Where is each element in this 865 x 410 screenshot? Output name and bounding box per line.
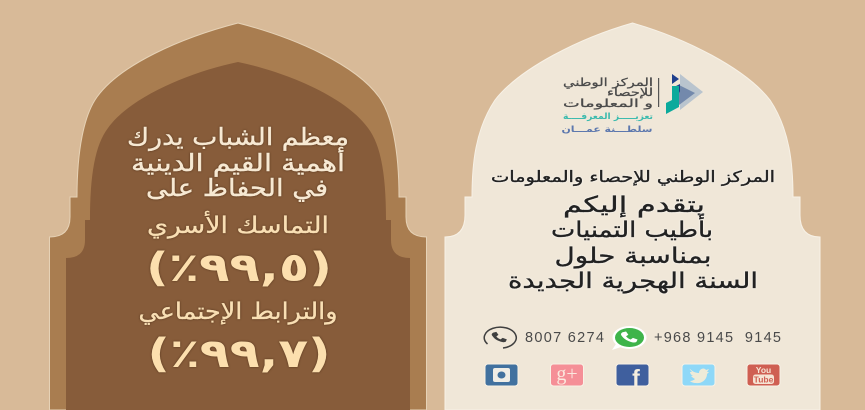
logo wordmark: و المعلومات [563, 97, 653, 110]
logo wordmark: المركز الوطني [563, 76, 653, 89]
heading: youth awareness [127, 123, 349, 202]
icon: twitter [682, 364, 715, 386]
text: organisation name: المركز الوطني للإحصاء والمعلومات [491, 168, 775, 187]
text: phone number: 8007 6274 [525, 330, 604, 346]
logo divider [658, 78, 659, 107]
icon: facebook: f [632, 365, 640, 391]
panel: statistics arch [50, 23, 426, 410]
logo mark [666, 74, 703, 114]
stat: 99.7 percent: (٪٩٩,٧) [148, 331, 330, 377]
logo tagline: تعزيـــــز المعرفــــة [563, 112, 653, 122]
stat: 99.5 percent: (٪٩٩,٥) [146, 245, 332, 291]
icon: google plus: g+ [556, 363, 578, 385]
cream arch [445, 23, 820, 410]
logo wordmark: للإحصاء [607, 86, 653, 99]
outer arch [50, 23, 426, 410]
label: family cohesion: التماسك الأسري [147, 211, 329, 239]
text: greeting message: بمناسبة حلول [554, 244, 712, 269]
logo country name: سلطـــنة عمـــان [562, 125, 652, 135]
panel: greeting arch [445, 23, 820, 410]
icon: youtube: Tube [754, 374, 774, 384]
text: greeting message: بأطيب التمنيات [551, 214, 713, 243]
heading: youth awareness: في الحفاظ على [146, 174, 328, 202]
text: greeting message: يتقدم إليكم [563, 193, 705, 218]
text: greeting message: السنة الهجرية الجديدة [508, 269, 758, 294]
icon: google plus [550, 363, 584, 386]
text: whatsapp number: +968 9145 9145 [654, 330, 781, 346]
heading: youth awareness: معظم الشباب يدرك [127, 123, 349, 151]
heading: youth awareness: أهمية القيم الدينية [131, 147, 345, 177]
icon: whatsapp [612, 326, 646, 350]
label: social bonding: والترابط الإجتماعي [138, 299, 338, 325]
icon: youtube [747, 364, 780, 386]
icon: youtube: You [756, 365, 771, 375]
inner arch [66, 62, 410, 410]
icon: instagram [485, 364, 518, 386]
text: greeting message [508, 193, 758, 294]
icon: facebook [616, 364, 649, 391]
logo wordmark [563, 76, 653, 110]
icon: phone [484, 327, 516, 348]
logo [562, 74, 703, 135]
